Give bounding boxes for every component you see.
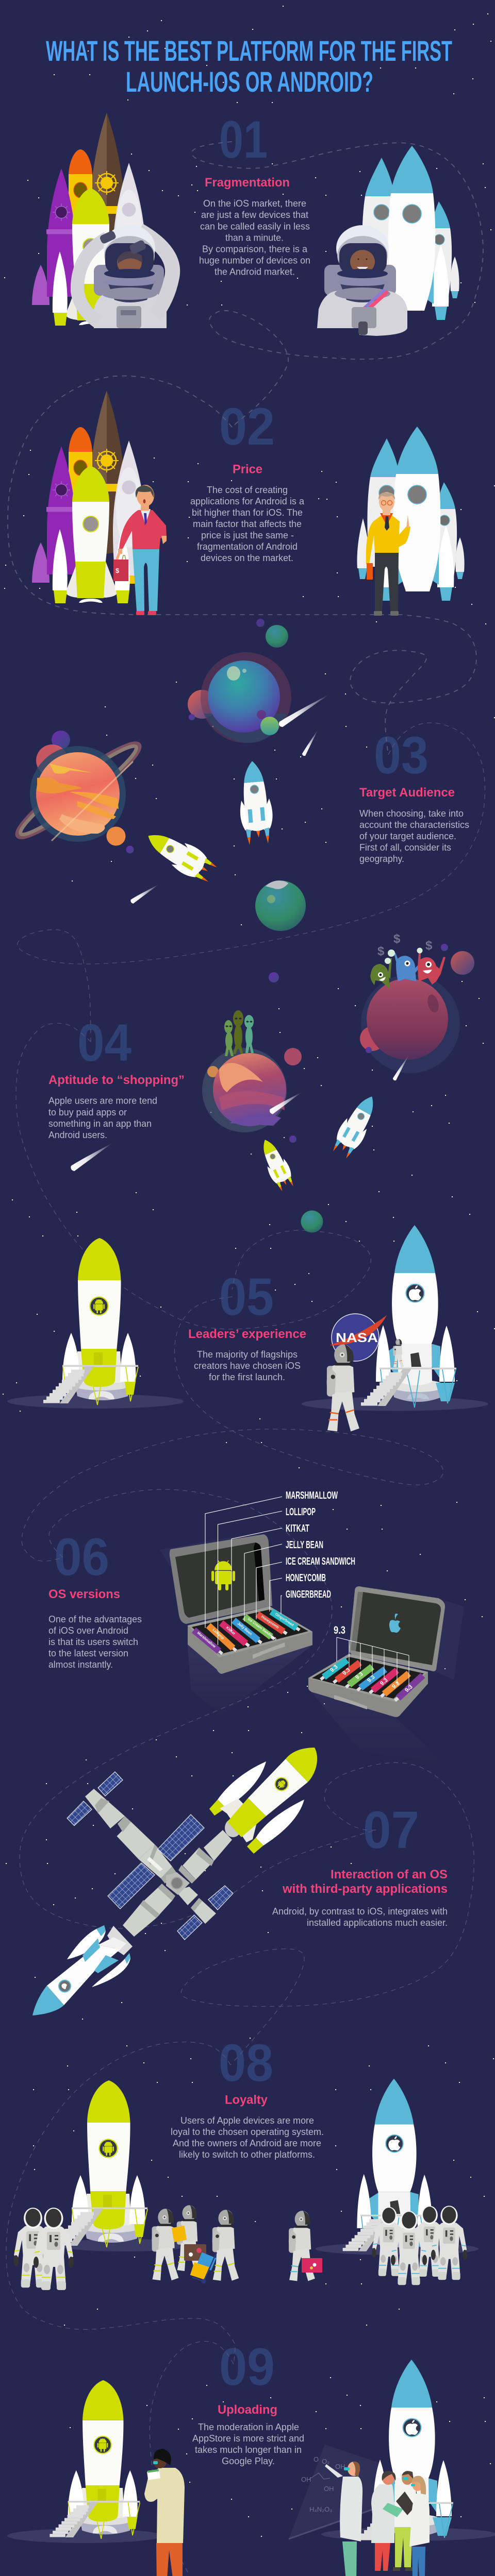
number 06: 06 (54, 1528, 109, 1586)
text: fragmentation body: huge number of devices on (199, 256, 310, 266)
text: fragmentation body: the Android market. (214, 267, 295, 277)
android version labels and leader lines: HONEYCOMB (286, 1572, 326, 1584)
illustration: pink planet with aliens (202, 1010, 302, 1132)
illustration: comet (269, 1090, 303, 1115)
illustration: space station (67, 1772, 233, 1940)
number 07: 07 (363, 1801, 419, 1859)
heading: Aptitude to shopping: Aptitude to “shopping” (48, 1073, 185, 1087)
illustration: iOS suitcase with version tubes: 9.3 (341, 1667, 352, 1676)
android version labels and leader lines (205, 1490, 355, 1645)
number 08: 08 (219, 2033, 273, 2092)
illustration: Android rocket section 08 (53, 2080, 147, 2247)
text: price body: devices on the market. (201, 553, 293, 563)
text: uploading body (192, 2422, 304, 2466)
text: OS versions body (48, 1614, 142, 1670)
text: target audience body (359, 808, 469, 864)
illustration: blue rocket docking (32, 1925, 133, 2015)
illustration: chalkboard with formulas: OH (324, 2485, 334, 2493)
illustration: blue planet system (188, 619, 291, 743)
illustration: iOS rocket section 09 (358, 2360, 453, 2542)
illustration: chalkboard with formulas: H₄N₂O₃ (309, 2505, 333, 2513)
section 02: Android rocket fleet (32, 391, 145, 603)
illustration: Android suitcase with version tubes (160, 1533, 312, 1716)
text: leaders body (194, 1349, 301, 1382)
illustration: small comet (392, 1055, 410, 1081)
illustration: maroon planet with monsters: $ (425, 939, 433, 953)
illustration: far planets (441, 944, 474, 975)
illustration: man in red jacket with bag: $ (116, 567, 120, 574)
text: uploading body: takes much longer than in (195, 2445, 302, 2455)
illustration: Android suitcase with version tubes: Ice Cream Sandwich (247, 1617, 277, 1641)
text: interaction body (272, 1906, 448, 1928)
android version labels and leader lines: LOLLIPOP (286, 1506, 316, 1518)
illustration: iOS suitcase with version tubes (308, 1586, 464, 1762)
illustration: iOS rocket on launch pad (361, 1225, 456, 1408)
number 04: 04 (77, 1013, 131, 1072)
illustration: blue rocket flying up (236, 760, 275, 845)
illustration: astronauts with luggage (152, 2205, 239, 2283)
number 09: 09 (219, 2337, 275, 2396)
illustration: lime rocket (255, 1136, 298, 1193)
illustration: iOS suitcase with version tubes: 9.3 (404, 1684, 414, 1693)
text: leaders body: creators have chosen iOS (194, 1361, 301, 1371)
text: uploading body: Google Play. (222, 2456, 275, 2466)
illustration: small purple planet (269, 972, 279, 982)
text: interaction body: Android, by contrast to iOS, integrates with (272, 1906, 448, 1917)
heading: OS versions: OS versions (48, 1587, 120, 1601)
heading: Uploading: Uploading (218, 2403, 277, 2417)
illustration: small astronaut at rocket (393, 1339, 404, 1367)
number 03: 03 (374, 726, 428, 785)
heading: Fragmentation: Fragmentation (205, 176, 290, 190)
number 02: 02 (219, 397, 275, 456)
illustration: iOS suitcase with version tubes: 9.3 (366, 1674, 376, 1684)
illustration: maroon planet with monsters: $ (377, 944, 385, 958)
heading: Interaction of an OS: Interaction of an OS (331, 1868, 448, 1882)
text: price body: price is just the same - (201, 530, 294, 540)
illustration: NASA logo (330, 1314, 387, 1361)
illustration: man in red jacket with bag (113, 485, 167, 615)
illustration: chalkboard with formulas: O₂ (322, 2458, 329, 2465)
9.3 label and bracket (334, 1624, 409, 1690)
illustration: chalkboard with formulas: O (314, 2455, 319, 2463)
android version labels and leader lines: JELLY BEAN (286, 1539, 323, 1551)
illustration: iOS astronaut with pink case (289, 2211, 322, 2281)
heading: Leaders experience: Leaders’ experience (188, 1327, 306, 1341)
illustration: iOS suitcase with version tubes: 9.3 (329, 1664, 339, 1673)
illustration: scientists at rocket (325, 2462, 430, 2576)
illustration: blue rocket (328, 1090, 383, 1161)
text: fragmentation body: On the iOS market, there (203, 198, 306, 209)
illustration: chalkboard with formulas: OH (301, 2476, 311, 2483)
text: loyalty body: likely to switch to other platforms. (179, 2149, 315, 2160)
illustration: iOS rocket section 08 (343, 2079, 434, 2253)
text: target audience body: First of all, consider its (359, 842, 451, 853)
illustration: small comet (130, 883, 160, 904)
illustration: Android suitcase with version tubes: Gingerbread (274, 1613, 294, 1627)
text: price body: The cost of creating (207, 485, 288, 495)
floor ellipse section 05 right (302, 1397, 488, 1411)
illustration: iOS suitcase with version tubes: 9.3 (379, 1677, 389, 1687)
illustration: Android suitcase with version tubes: KitKat (225, 1626, 236, 1636)
text: uploading body: AppStore is more strict and (192, 2433, 304, 2444)
android version labels and leader lines: ICE CREAM SANDWICH (286, 1556, 355, 1567)
illustration: small comet (302, 729, 320, 757)
text: fragmentation body (199, 198, 310, 277)
text: target audience body: of your target audience. (359, 831, 456, 841)
illustration: Android astronaut pair (13, 2208, 74, 2290)
title (46, 35, 452, 98)
9.3 label and bracket: 9.3 (334, 1624, 345, 1636)
text: price body: applications for Android is a (190, 496, 305, 506)
heading: Price: Price (233, 463, 262, 476)
illustration: iOS suitcase with version tubes: 9.3 (354, 1671, 365, 1681)
text: shopping body: Apple users are more tend (48, 1095, 157, 1106)
illustration: ringed orange planet (11, 731, 146, 853)
floor ellipse section 08 right (316, 2243, 478, 2255)
illustration: saluting astronaut (77, 225, 173, 328)
text: shopping body (48, 1095, 157, 1140)
illustration: chalkboard with formulas (289, 2445, 379, 2539)
text: target audience body: When choosing, take into (359, 808, 464, 819)
text: target audience body: geography. (359, 854, 404, 864)
heading: Target Audience: Target Audience (359, 786, 455, 800)
text: price body: main factor that affects the (193, 519, 302, 529)
android version labels and leader lines: MARSHMALLOW (286, 1490, 338, 1501)
text: leaders body: The majority of flagships (197, 1349, 298, 1360)
illustration: Android suitcase with version tubes: Marshmallow (196, 1631, 217, 1649)
section 01: Android rocket fleet (32, 113, 145, 326)
illustration: chalkboard with formulas: OH (335, 2463, 345, 2470)
text: loyalty body (171, 2115, 324, 2160)
number 05: 05 (219, 1267, 274, 1326)
text: OS versions body: is that its users switch (48, 1637, 138, 1647)
text: loyalty body: Users of Apple devices are more (180, 2115, 314, 2126)
text: price body: fragmentation of Android (197, 541, 298, 552)
text: fragmentation body: By comparison, there is a (202, 244, 308, 255)
illustration: maroon planet with monsters: $ (393, 932, 401, 946)
floor ellipse section 08 left (57, 2239, 191, 2251)
text: fragmentation body: than a minute. (225, 233, 284, 243)
illustration: man in yellow jacket with bag (366, 492, 410, 616)
section 01: iOS rocket fleet (352, 146, 459, 320)
text: uploading body: The moderation in Apple (198, 2422, 299, 2432)
section 02: iOS rocket fleet (357, 427, 465, 601)
number 01: 01 (219, 110, 268, 169)
text: OS versions body: to the latest version (48, 1648, 128, 1658)
heading: Interaction of an OS: with third-party applications (282, 1882, 448, 1896)
illustration: NASA logo: NASA (336, 1331, 378, 1345)
text: fragmentation body: can be called easily in less (200, 222, 310, 232)
text: shopping body: Android users. (48, 1130, 107, 1140)
text: price body (190, 485, 305, 563)
illustration: Android rocket section 09 (50, 2380, 140, 2539)
illustration: large comet (70, 1141, 114, 1172)
text: OS versions body: almost instantly. (48, 1659, 113, 1670)
illustration: earth planet (255, 880, 306, 931)
text: fragmentation body: are just a few devices that (201, 210, 308, 220)
text: price body: bit higher than for iOS. The (192, 507, 303, 518)
text: leaders body: for the first launch. (209, 1372, 285, 1382)
illustration: iOS astronaut group (372, 2206, 467, 2285)
floor ellipse section 09 left (7, 2529, 162, 2543)
illustration: tiny planet (289, 1136, 296, 1143)
illustration: Android suitcase with version tubes: Jelly Bean (237, 1622, 253, 1636)
text: OS versions body: One of the advantages (48, 1614, 142, 1624)
text: loyalty body: And the owners of Android are more (173, 2138, 321, 2148)
text: shopping body: to buy paid apps or (48, 1107, 127, 1117)
illustration: Android suitcase with version tubes: Lollipop (212, 1628, 225, 1640)
text: shopping body: something in an app than (48, 1118, 152, 1129)
heading: Interaction of an OS (282, 1868, 448, 1896)
heading: Loyalty: Loyalty (225, 2093, 268, 2107)
android version labels and leader lines: KITKAT (286, 1523, 309, 1534)
illustration: Android rocket on launch pad (43, 1238, 138, 1405)
illustration: Android suitcase with version tubes: Honeycomb (260, 1615, 279, 1630)
illustration: lime rocket docking (209, 1748, 317, 1854)
illustration: smiling astronaut (317, 225, 407, 336)
illustration: lime rocket flying diagonal (141, 823, 220, 887)
illustration: big astronaut (327, 1344, 359, 1431)
floor ellipse section 09 right (321, 2528, 495, 2541)
text: loyalty body: loyal to the chosen operating system. (171, 2127, 324, 2137)
text: target audience body: account the characteristics (359, 820, 469, 830)
illustration: maroon planet with monsters (360, 932, 460, 1073)
text: OS versions body: of iOS over Android (48, 1625, 128, 1636)
floor ellipse section 05 left (7, 1394, 184, 1409)
illustration: small earth (301, 1211, 323, 1232)
android version labels and leader lines: GINGERBREAD (286, 1589, 331, 1600)
illustration: scientist reading notes (144, 2449, 185, 2576)
text: interaction body: installed applications much easier. (307, 1918, 448, 1928)
illustration: iOS suitcase with version tubes: 9.3 (391, 1680, 401, 1690)
illustration: comet (278, 692, 332, 728)
